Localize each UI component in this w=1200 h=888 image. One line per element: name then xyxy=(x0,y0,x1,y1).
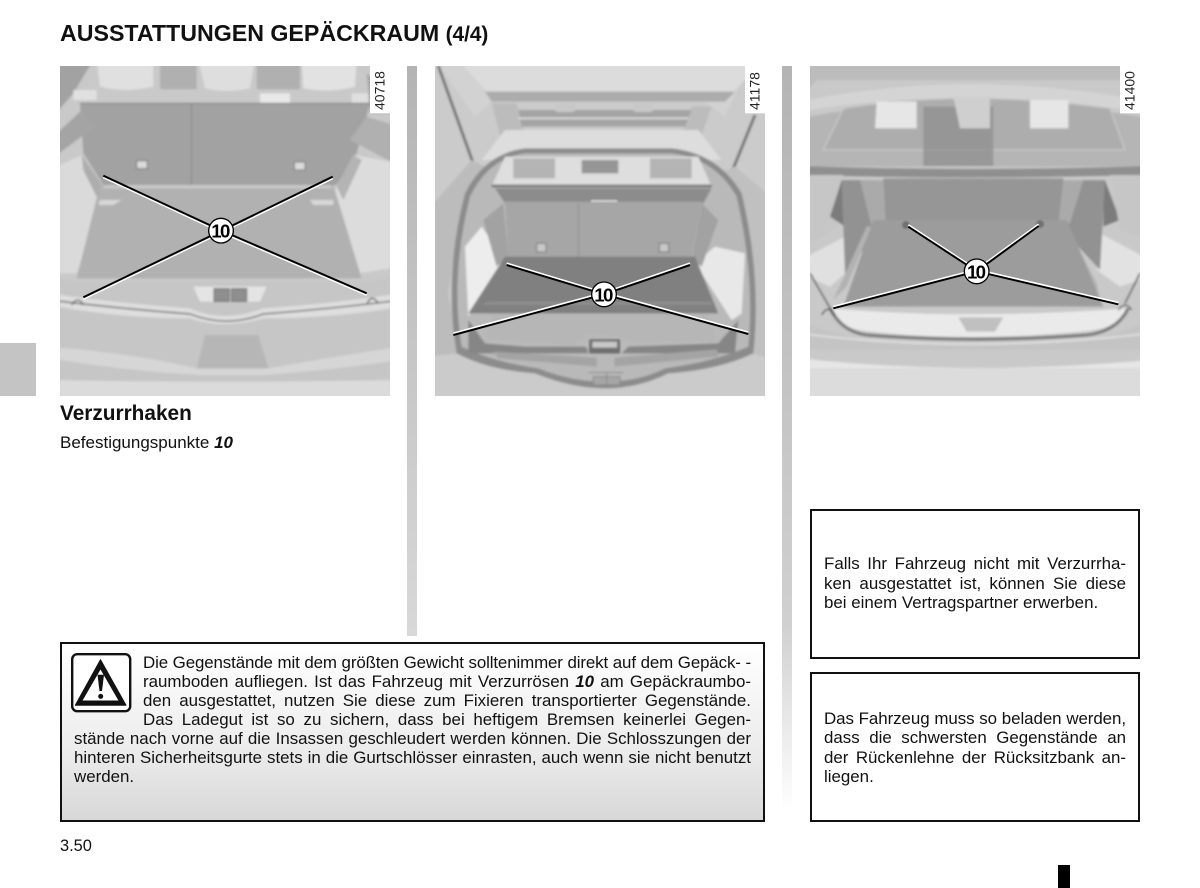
illustration: estate boot with lashing points xyxy=(435,66,765,396)
panel: note on retrofit: Falls Ihr Fahrzeug nicht mit Verzurrha- xyxy=(824,554,1126,573)
code label: 40718 xyxy=(371,71,387,110)
callout number 10 xyxy=(209,218,233,243)
code label: 41400 xyxy=(1121,71,1137,110)
warning text: Das Ladegut ist so zu sichern, dass bei heftigem Bremsen keinerlei Gegen- xyxy=(143,710,751,729)
code label xyxy=(1120,66,1140,113)
panel: note on retrofit: ken ausgestattet ist, können Sie diese xyxy=(824,574,1126,593)
panel: note on retrofit: bei einem Vertragspartner erwerben. xyxy=(824,593,1098,612)
callout number 10: 10 xyxy=(594,284,613,305)
page marker xyxy=(1058,865,1070,888)
warning text xyxy=(74,653,751,786)
chapter tab xyxy=(0,343,36,396)
callout lines xyxy=(833,224,1118,308)
illustration: hatchback boot with lashing points xyxy=(60,66,390,396)
callout lines xyxy=(83,176,367,299)
callout lines xyxy=(453,263,748,335)
panel: note on loading: dass die schwersten Gegenstände an xyxy=(824,728,1126,747)
warning text: stände nach vorne auf die Insassen geschleudert werden können. Die Schlosszungen der xyxy=(74,729,751,748)
code label xyxy=(745,66,765,113)
column separator: right xyxy=(782,66,792,811)
panel: note on loading xyxy=(810,672,1140,822)
title: AUSSTATTUNGEN GEPÄCKRAUM (4/4) xyxy=(60,20,488,46)
column separator: left xyxy=(407,66,417,636)
text: Befestigungspunkte: Befestigungspunkte 10 xyxy=(60,433,233,452)
warning text: werden. xyxy=(74,767,134,786)
panel: warning xyxy=(60,642,765,822)
page number: 3.50 xyxy=(60,837,92,855)
warning text: raumboden aufliegen. Ist das Fahrzeug mit Verzurrösen 10 am Gepäckraumbo- xyxy=(143,672,751,691)
heading: Verzurrhaken: Verzurrhaken xyxy=(60,402,192,425)
panel: note on retrofit xyxy=(810,509,1140,659)
callout number 10 xyxy=(592,282,616,307)
panel: note on loading: liegen. xyxy=(824,767,874,786)
illustration: saloon boot with lashing points xyxy=(810,66,1140,396)
warning text: hinteren Sicherheitsgurte stets in die Gurtschlösser einrasten, auch wenn sie nicht benutzt xyxy=(74,748,751,767)
panel: note on loading: Das Fahrzeug muss so beladen werden, xyxy=(824,709,1126,728)
callout number 10 xyxy=(964,259,989,284)
warning text: Die Gegenstände mit dem größten Gewicht solltenimmer direkt auf dem Gepäck- - xyxy=(143,653,751,672)
code label: 41178 xyxy=(746,72,762,110)
icon: warning triangle xyxy=(71,653,132,712)
warning text: den ausgestattet, nutzen Sie diese zum Fixieren transportierter Gegenstände. xyxy=(143,691,751,710)
callout number 10: 10 xyxy=(967,261,986,282)
code label xyxy=(370,66,390,113)
callout number 10: 10 xyxy=(211,221,230,242)
panel: note on loading: der Rückenlehne der Rücksitzbank an- xyxy=(824,748,1126,767)
